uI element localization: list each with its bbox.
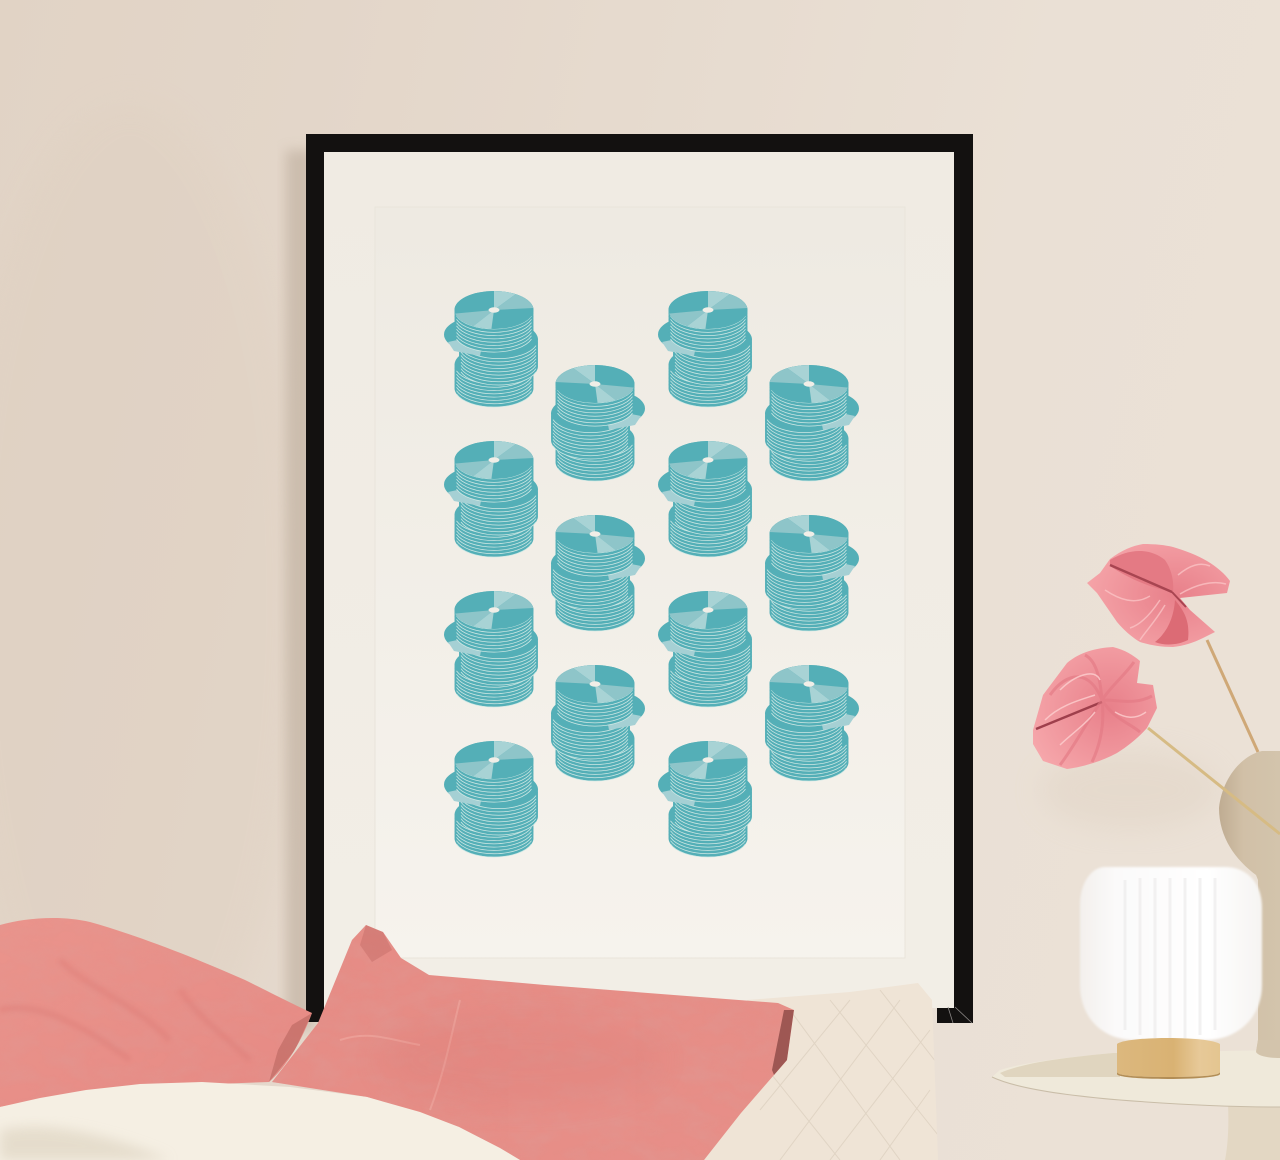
anthurium flower lower [1033, 647, 1157, 769]
picture frame [306, 134, 973, 1023]
lamp shade [1080, 867, 1262, 1040]
table top shadow [1000, 1053, 1120, 1077]
column 4 stacks [763, 362, 859, 781]
table edge [992, 1077, 1280, 1107]
pink pillow left [0, 910, 320, 1110]
column 1 stacks [444, 288, 540, 857]
frame corner detail [948, 1007, 972, 1023]
table top surface [992, 1050, 1280, 1107]
vase foot on table [1256, 1040, 1280, 1058]
stem: lower flower [1148, 728, 1280, 834]
side table [992, 1050, 1280, 1160]
column 2 stacks [549, 362, 645, 781]
table leg [1225, 1104, 1280, 1160]
stem: upper flower [1207, 640, 1258, 752]
pink pillow centre [270, 920, 800, 1160]
frame shadow on wall [286, 150, 314, 1030]
print paper [375, 207, 905, 958]
anthurium flower upper [1087, 544, 1230, 647]
disc stacks artwork [444, 288, 859, 857]
white knit cushion [0, 1082, 520, 1160]
mat board [324, 152, 954, 1008]
vase [1219, 751, 1280, 1058]
column 3 stacks [658, 288, 754, 857]
lamp base [1117, 1038, 1220, 1079]
cream diamond pillow [747, 983, 937, 1160]
